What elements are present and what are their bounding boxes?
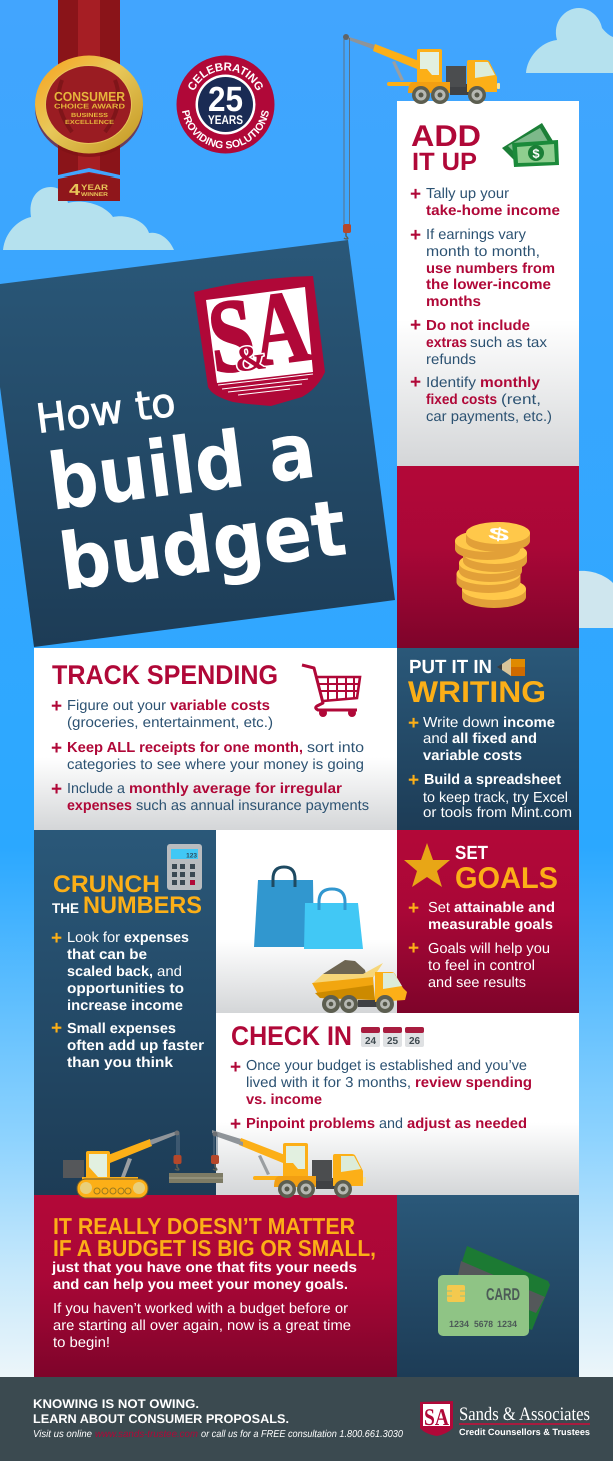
bullet list: add it up: use numbers from (426, 261, 555, 277)
bullet list: check in (230, 1057, 532, 1135)
panel: tilted title card (0, 240, 395, 647)
bullet list: track spending: + (51, 696, 62, 717)
bullet list: crunch: expenses (124, 930, 189, 946)
icon: calendars: 26 (409, 1036, 420, 1047)
bullet list: check in: and (379, 1116, 403, 1132)
cloud: top right (526, 8, 613, 73)
award ribbon badge: BUSINESS (71, 112, 108, 119)
heading: closing message: IT REALLY DOESN’T MATTER (53, 1213, 355, 1239)
heading: crunch the numbers (52, 871, 202, 919)
bullet list: add it up: Identify (426, 375, 477, 391)
heading: track spending: TRACK SPENDING (52, 660, 278, 690)
bullet list: add it up: extras (426, 335, 467, 351)
heading: crunch the numbers: THE (52, 900, 79, 916)
panel: track spending (34, 648, 397, 830)
bullet list: goals: Set (428, 900, 450, 916)
bullet list: crunch: opportunities to (67, 981, 184, 997)
footer call to action: Visit us online (33, 1429, 92, 1440)
bullet list: crunch: increase income (67, 998, 183, 1014)
icon: coin stack: $ (487, 523, 511, 545)
heading: set goals (455, 843, 558, 895)
bullet list: add it up (410, 184, 560, 425)
bullet list: add it up: + (410, 225, 421, 246)
bullet list: writing: Write down (423, 715, 499, 731)
bullet list: writing: variable costs (423, 748, 522, 764)
heading: add it up: IT UP (412, 148, 477, 176)
icon: star (404, 843, 450, 887)
bullet list: track spending: (groceries, entertainment, etc.) (67, 715, 273, 731)
heading: closing message (53, 1213, 376, 1261)
bullet list: track spending: expenses (67, 798, 132, 814)
text block: closing message: are starting all over again, now is a great time (53, 1318, 351, 1334)
bullet list: writing: + (408, 713, 419, 734)
bullet list: track spending: Figure out your (67, 698, 166, 714)
icon: calendars (361, 1027, 424, 1047)
title text (33, 380, 351, 609)
footer call to action: KNOWING IS NOT OWING. (33, 1397, 199, 1411)
title text: build a (43, 406, 320, 529)
icon: pencil (497, 658, 525, 676)
heading: crunch the numbers: CRUNCH (53, 871, 160, 898)
icon: credit card: 5678 (474, 1319, 493, 1329)
icon: credit card: CARD (486, 1285, 520, 1304)
text block: closing message: to begin! (53, 1335, 110, 1351)
footer call to action: or call us for a FREE consultation 1.800.661.3030 (201, 1429, 403, 1440)
bullet list: goals (408, 898, 555, 991)
bullet list: check in: vs. income (246, 1092, 322, 1108)
bullet list: add it up: take-home income (426, 203, 560, 219)
bullet list: add it up: refunds (426, 352, 476, 368)
icon: coin stack (455, 522, 530, 608)
bullet list: writing: all fixed and (452, 731, 537, 747)
panel: put it in writing (397, 648, 579, 830)
heading: crunch the numbers: NUMBERS (83, 892, 202, 919)
icon: money (502, 123, 559, 167)
cloud: top left (3, 187, 174, 250)
bullet list: goals: + (408, 898, 419, 919)
footer logo (420, 1401, 590, 1437)
award ribbon badge: EXCELLENCE (65, 119, 114, 126)
25 years badge (176, 56, 274, 154)
bullet list: crunch: Small expenses (67, 1021, 176, 1037)
icon: calendars: 24 (365, 1036, 376, 1047)
logo: S&A shield: & (232, 336, 269, 380)
crane truck on top of panel (343, 34, 500, 239)
icon: dump truck (312, 960, 407, 1013)
bullet list: track spending: variable costs (170, 698, 270, 714)
bullet list: crunch: Look for (67, 930, 120, 946)
cloud: middle right (579, 571, 613, 628)
bullet list: track spending: monthly average for irregular (129, 781, 342, 797)
bullet list: writing: to keep track, try Excel (423, 790, 568, 806)
icon: calendars: 25 (387, 1036, 398, 1047)
bullet list: add it up: + (410, 184, 421, 205)
icon: credit card: 1234 (497, 1319, 517, 1329)
bullet list: goals: to feel in control (428, 958, 535, 974)
bullet list: add it up: monthly (480, 375, 540, 391)
panel: shopping bags (216, 830, 397, 1013)
bullet list: track spending (51, 696, 369, 814)
panel: closing message (34, 1195, 397, 1377)
title text: budget (54, 483, 351, 609)
bullet list: add it up: If earnings vary (426, 227, 527, 243)
25 years badge: YEARS (208, 113, 243, 127)
bullet list: add it up: such as tax (470, 335, 548, 351)
heading: put it in writing: PUT IT IN (409, 657, 492, 678)
award ribbon badge: WINNER (81, 192, 108, 198)
bullet list: crunch: + (51, 928, 62, 949)
award ribbon badge: YEAR (81, 183, 108, 192)
panel: coins (397, 466, 579, 648)
25 years badge: PROVIDING SOLUTIONS (182, 110, 269, 148)
bullet list: crunch: that can be (67, 947, 147, 963)
bullet list: track spending: + (51, 738, 62, 759)
heading: put it in writing (408, 657, 546, 709)
heading: check in: CHECK IN (231, 1021, 352, 1051)
heading: add it up: ADD (411, 120, 481, 153)
text block: closing message (51, 1260, 357, 1351)
icon: money: $ (532, 146, 540, 161)
bullet list: add it up: fixed costs (426, 392, 497, 408)
footer logo: SA (424, 1405, 450, 1431)
bullet list: track spending: Include a (67, 781, 126, 797)
footer call to action: LEARN ABOUT CONSUMER PROPOSALS. (33, 1412, 289, 1426)
truck crane at bottom (211, 1130, 366, 1198)
heading: set goals: SET (455, 843, 488, 864)
25 years badge: CELEBRATING (188, 62, 263, 90)
bullet list: goals: and see results (428, 975, 526, 991)
logo: S&A shield: S (202, 276, 261, 396)
bullet list: writing: Build a spreadsheet (424, 772, 561, 788)
bullet list: add it up: the lower-income (426, 277, 551, 293)
panel: add it up (397, 101, 579, 466)
bullet list: check in: Pinpoint problems (246, 1116, 375, 1132)
bullet list: add it up: Do not include (426, 318, 530, 334)
25 years badge: 25 (208, 80, 243, 119)
bullet list: add it up: months (426, 294, 481, 310)
bullet list: track spending: such as annual insurance payments (136, 798, 369, 814)
bullet list: check in: review spending (415, 1075, 532, 1091)
award ribbon badge: 4 (69, 182, 80, 199)
logo: S&A shield (194, 268, 325, 406)
footer logo: Credit Counsellors & Trustees (459, 1427, 590, 1437)
footer (0, 1377, 613, 1461)
icon: credit card: 1234 (449, 1319, 469, 1329)
bullet list: add it up: (rent, (501, 392, 541, 408)
panel: credit card (397, 1195, 579, 1377)
bullet list: add it up: Tally up your (426, 186, 509, 202)
panel: crunch the numbers (34, 830, 216, 1195)
bullet list: crunch: scaled back, (67, 964, 153, 980)
bullet list: track spending: sort into (307, 740, 364, 756)
bullet list: add it up: + (410, 315, 421, 336)
bullet list: check in: lived with it for 3 months, (246, 1075, 411, 1091)
heading: put it in writing: WRITING (408, 676, 546, 709)
award ribbon badge (35, 0, 143, 201)
bullet list: track spending: categories to see where your money is going (67, 757, 364, 773)
bullet list: writing (408, 713, 572, 821)
icon: credit card (438, 1246, 550, 1336)
bullet list: check in: Once your budget is established and you’ve (246, 1058, 527, 1074)
bullet list: goals: attainable and (454, 900, 555, 916)
heading: closing message: IF A BUDGET IS BIG OR SMALL, (53, 1235, 376, 1261)
bullet list: goals: + (408, 938, 419, 959)
bullet list: goals: Goals will help you (428, 941, 550, 957)
footer logo: Sands & Associates (459, 1404, 590, 1425)
heading: set goals: GOALS (455, 862, 558, 895)
bullet list: add it up: month to month, (426, 244, 540, 260)
panel: check in (216, 1013, 579, 1195)
bullet list: check in: + (230, 1057, 241, 1078)
icon: calculator (167, 844, 202, 890)
text block: closing message: If you haven’t worked with a budget before or (53, 1301, 348, 1317)
bullet list: writing: income (503, 715, 555, 731)
crawler crane and beam (63, 1130, 223, 1198)
bullet list: writing: + (408, 770, 419, 791)
bullet list: check in: adjust as needed (407, 1116, 527, 1132)
award ribbon badge: CHOICE AWARD (54, 104, 125, 110)
bullet list: goals: measurable goals (428, 917, 553, 933)
award ribbon badge: CONSUMER (54, 89, 126, 104)
icon: shopping bags (254, 867, 363, 949)
bullet list: add it up: car payments, etc.) (426, 409, 552, 425)
icon: calculator: 123 (186, 852, 197, 860)
bullet list: crunch: + (51, 1018, 62, 1039)
bullet list: add it up: + (410, 372, 421, 393)
panel: set goals (397, 830, 579, 1013)
bullet list: crunch (51, 928, 204, 1071)
footer call to action (33, 1397, 403, 1440)
footer call to action: www.sands-trustee.com (95, 1429, 198, 1440)
bullet list: crunch: and (157, 964, 182, 980)
bullet list: check in: + (230, 1114, 241, 1135)
bullet list: writing: and (423, 731, 448, 747)
bullet list: crunch: often add up faster (67, 1038, 204, 1054)
heading: add it up (411, 120, 481, 176)
icon: shopping cart (302, 665, 360, 716)
title text: How to (33, 380, 178, 443)
bullet list: track spending: Keep ALL receipts for one month, (67, 740, 303, 756)
logo: S&A shield: A (245, 268, 315, 389)
text block: closing message: just that you have one that fits your needs (51, 1260, 357, 1276)
text block: closing message: and can help you meet your money goals. (53, 1277, 348, 1293)
bullet list: writing: or tools from Mint.com (423, 805, 572, 821)
bullet list: track spending: + (51, 779, 62, 800)
bullet list: crunch: than you think (67, 1055, 174, 1071)
